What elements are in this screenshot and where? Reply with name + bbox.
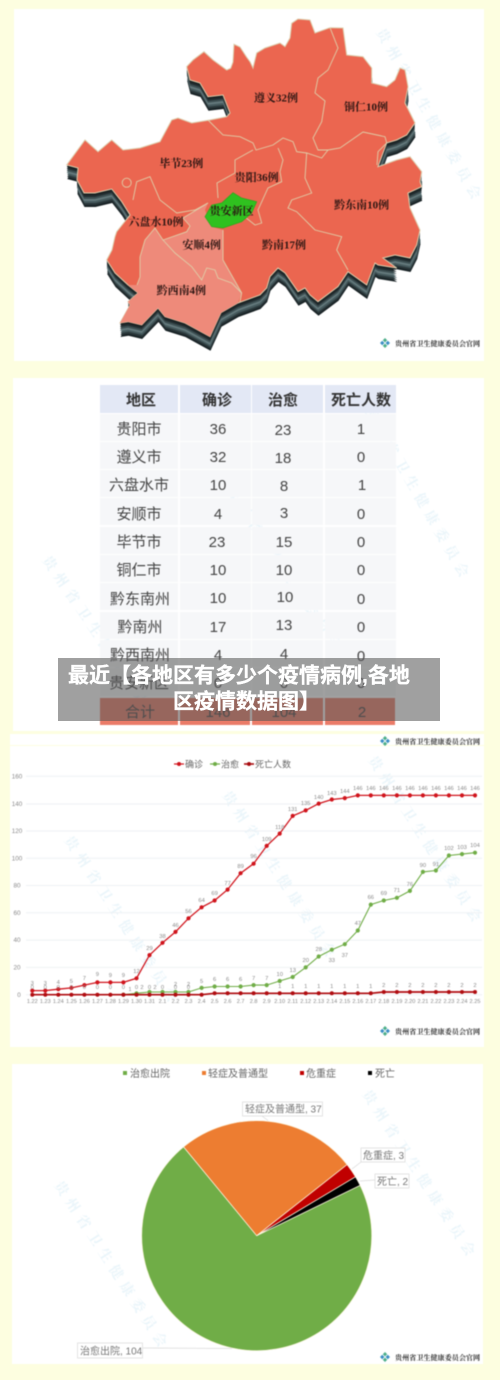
table body: 六盘水市 bbox=[109, 476, 169, 494]
pie label: mild 37 bbox=[242, 1102, 322, 1120]
logo: map panel bbox=[380, 338, 480, 348]
chart gridlines and axes: 2.16 bbox=[352, 999, 363, 1005]
data labels: deaths: 0 bbox=[174, 985, 177, 991]
table body: 0 bbox=[357, 648, 365, 665]
table body: 10 bbox=[276, 562, 292, 579]
table body: 10 bbox=[210, 590, 226, 607]
data labels: confirmed: 131 bbox=[288, 807, 298, 813]
data labels: confirmed: 146 bbox=[431, 786, 441, 792]
data labels: confirmed: 12 bbox=[133, 969, 140, 975]
table body: 0 bbox=[214, 675, 222, 692]
data labels: deaths: 0 bbox=[31, 985, 34, 991]
data labels: confirmed: 143 bbox=[327, 791, 337, 797]
chart gridlines and axes: 140 bbox=[12, 801, 23, 808]
chart gridlines and axes: 1.28 bbox=[105, 999, 116, 1005]
pie label: deaths 2 bbox=[360, 1174, 409, 1188]
data labels: confirmed: 146 bbox=[444, 786, 454, 792]
table body: 贵安新区 bbox=[109, 675, 169, 692]
title overlay banner bbox=[58, 658, 440, 721]
map label: Qiannan: 黔南17例 bbox=[262, 238, 306, 252]
chart gridlines and axes: 2.15 bbox=[339, 999, 350, 1005]
data labels: cured: 69 bbox=[381, 891, 387, 897]
data labels: deaths: 2 bbox=[382, 983, 385, 989]
map label: Qianxinan: 黔西南4例 bbox=[157, 283, 206, 297]
panel: line chart: 贵州省卫生健康委员会 bbox=[219, 788, 342, 965]
table body: 0 bbox=[357, 591, 365, 608]
series: cured (green) bbox=[123, 853, 475, 995]
chart gridlines and axes: 2.13 bbox=[313, 999, 324, 1005]
chart gridlines and axes: 40 bbox=[13, 937, 21, 944]
pie legend: 治愈出院 bbox=[130, 1067, 170, 1080]
panel: pie chart: 贵州省卫生健康委员会 bbox=[51, 1178, 174, 1355]
data labels: confirmed: 144 bbox=[340, 789, 350, 795]
data labels: cured: 6 bbox=[239, 977, 242, 983]
chart gridlines and axes: 0 bbox=[17, 992, 21, 999]
panel: map bbox=[14, 9, 487, 361]
data labels: deaths: 0 bbox=[57, 985, 60, 991]
pie legend: 死亡 bbox=[375, 1067, 395, 1080]
map label: Zunyi: 遵义32例 bbox=[254, 91, 298, 105]
data labels: deaths: 0 bbox=[187, 985, 190, 991]
chart gridlines and axes: 2.7 bbox=[237, 999, 244, 1005]
data labels: deaths: 1 bbox=[330, 984, 333, 990]
chart gridlines and axes: 1.24 bbox=[53, 999, 64, 1005]
table header: 治愈 bbox=[268, 391, 298, 409]
data labels: deaths: 0 bbox=[44, 985, 47, 991]
data labels: confirmed: 7 bbox=[83, 976, 86, 982]
logo: map panel: 贵州省卫生健康委员会官网 bbox=[395, 339, 480, 348]
chart legend: 死亡人数 bbox=[255, 758, 291, 770]
chart gridlines and axes: 2.3 bbox=[185, 999, 192, 1005]
map label: Gui'an: 贵安新区 bbox=[210, 204, 254, 218]
chart gridlines and axes: 2.24 bbox=[457, 999, 467, 1005]
table total row: 合计 bbox=[125, 704, 155, 721]
data labels: deaths: 2 bbox=[447, 983, 451, 989]
table body: 15 bbox=[276, 534, 292, 551]
table body: 黔东南州 bbox=[110, 591, 170, 608]
map label: Bijie: 毕节23例 bbox=[159, 156, 203, 170]
table body: 4 bbox=[280, 646, 288, 663]
data labels: cured: 2 bbox=[187, 982, 190, 988]
table body: 18 bbox=[275, 450, 291, 467]
table body: 0 bbox=[357, 449, 365, 466]
data labels: cured: 6 bbox=[213, 977, 216, 983]
table body: 8 bbox=[280, 478, 288, 495]
panel: line chart bbox=[10, 746, 488, 1047]
pie legend bbox=[123, 1067, 395, 1080]
logo: chart panel bbox=[380, 1026, 480, 1036]
table body: 安顺市 bbox=[116, 506, 162, 523]
chart gridlines and axes: 2.1 bbox=[159, 999, 166, 1005]
data labels: deaths: 2 bbox=[395, 983, 399, 989]
pie label: cured 104 bbox=[78, 1343, 232, 1358]
data labels: confirmed: 3 bbox=[31, 981, 34, 987]
data labels: deaths: 2 bbox=[408, 983, 412, 989]
chart gridlines and axes: 1.22 bbox=[27, 999, 38, 1005]
chart gridlines and axes: 2.9 bbox=[263, 999, 271, 1005]
data labels: cured: 33 bbox=[329, 958, 335, 964]
chart gridlines and axes: 2.17 bbox=[365, 999, 376, 1005]
chart gridlines and axes: 1.23 bbox=[40, 999, 51, 1005]
chart gridlines and axes: 1.26 bbox=[79, 999, 90, 1005]
chart gridlines and axes: 60 bbox=[13, 910, 21, 917]
pie label: severe 3: 危重症, 3 bbox=[363, 1149, 405, 1162]
logo: table panel: 贵州省卫生健康委员会官网 bbox=[395, 737, 480, 746]
panel: table bbox=[10, 378, 484, 746]
data labels: confirmed: 109 bbox=[262, 837, 272, 843]
table header: 地区 bbox=[126, 392, 156, 409]
data labels: confirmed: 38 bbox=[159, 934, 166, 940]
table body: 贵阳市 bbox=[116, 421, 162, 438]
data labels: deaths: 1 bbox=[343, 984, 346, 990]
table body: 32 bbox=[210, 449, 226, 466]
title text bbox=[68, 664, 410, 714]
table body: 3 bbox=[280, 505, 288, 522]
data labels: cured: 66 bbox=[368, 895, 374, 901]
chart gridlines and axes bbox=[12, 774, 482, 1005]
pie label: severe 3 bbox=[352, 1148, 405, 1169]
table body: 4 bbox=[214, 506, 222, 523]
table body: 13 bbox=[276, 617, 292, 634]
map label: Guiyang: 贵阳36例 bbox=[235, 170, 279, 184]
table body: 0 bbox=[280, 675, 288, 692]
panel: table: 贵州省卫生健康委员会 bbox=[222, 483, 348, 658]
title text: 最近【各地区有多少个疫情病例,各地 bbox=[68, 664, 410, 688]
data labels: deaths: 2 bbox=[421, 983, 425, 989]
table body: 黔西南州 bbox=[110, 647, 170, 664]
table body: 遵义市 bbox=[116, 448, 162, 466]
region borders bbox=[122, 28, 387, 302]
chart gridlines and axes: 2.8 bbox=[250, 999, 257, 1005]
data labels: cured: 2 bbox=[153, 985, 157, 991]
chart gridlines and axes: 1.29 bbox=[118, 999, 129, 1005]
logo: table panel bbox=[380, 736, 480, 746]
data labels: deaths: 0 bbox=[161, 985, 164, 991]
panel: map: 贵州省卫生健康委员会 bbox=[373, 26, 487, 207]
chart legend: 治愈 bbox=[221, 758, 239, 770]
panel: line chart: 贵州省卫生健康委员会 bbox=[61, 833, 184, 1010]
chart gridlines and axes: 2.23 bbox=[443, 999, 454, 1005]
chart gridlines and axes: 2.2 bbox=[172, 999, 179, 1005]
data labels: deaths: 2 bbox=[434, 983, 438, 989]
data labels: confirmed: 146 bbox=[392, 786, 402, 792]
data labels: deaths: 0 bbox=[70, 985, 73, 991]
table body: 23 bbox=[209, 534, 225, 551]
data labels: cured: 6 bbox=[226, 977, 229, 983]
data labels: deaths: 1 bbox=[304, 984, 307, 990]
map label: Liupanshui: 六盘水10例 bbox=[129, 214, 183, 228]
data labels: confirmed: 96 bbox=[250, 854, 257, 860]
data labels: deaths: 2 bbox=[460, 983, 464, 989]
chart gridlines and axes: 2.10 bbox=[274, 999, 285, 1005]
chart legend: 确诊 bbox=[185, 758, 203, 770]
data labels: confirmed: 146 bbox=[405, 786, 415, 792]
data labels: deaths: 0 bbox=[96, 985, 99, 991]
map labels bbox=[129, 91, 389, 297]
chart gridlines and axes: 2.25 bbox=[470, 999, 480, 1005]
chart gridlines and axes: 2.12 bbox=[300, 999, 311, 1005]
pie label: cured 104: 治愈出院, 104 bbox=[80, 1344, 143, 1358]
chart gridlines and axes: 1.31 bbox=[144, 999, 155, 1005]
data labels: confirmed: 46 bbox=[172, 923, 179, 929]
data labels: deaths: 2 bbox=[473, 983, 477, 989]
data labels: cured: 76 bbox=[407, 882, 413, 888]
data labels: deaths: 1 bbox=[356, 984, 359, 990]
data labels: cured: 104 bbox=[470, 843, 481, 849]
data labels: cured: 103 bbox=[457, 845, 467, 851]
data labels: confirmed: 56 bbox=[185, 909, 192, 915]
pie slices bbox=[142, 1121, 372, 1351]
panel: pie chart bbox=[12, 1064, 483, 1364]
map of Guizhou bbox=[67, 19, 422, 351]
chart gridlines and axes: 2.14 bbox=[326, 999, 337, 1005]
data labels: deaths: 1 bbox=[278, 984, 281, 990]
data labels: confirmed: 9 bbox=[122, 973, 125, 979]
table body: 23 bbox=[275, 422, 291, 439]
data labels: confirmed: 146 bbox=[366, 786, 376, 792]
data labels: cured: 47 bbox=[355, 921, 361, 927]
chart gridlines and axes: 120 bbox=[12, 828, 23, 835]
chart gridlines and axes: 2.22 bbox=[430, 999, 441, 1005]
pie legend: 轻症及普通型 bbox=[208, 1067, 268, 1080]
table body: 10 bbox=[277, 589, 293, 606]
data labels: confirmed: 146 bbox=[418, 786, 428, 792]
logo: pie panel: 贵州省卫生健康委员会官网 bbox=[395, 1353, 480, 1362]
data labels: cured: 7 bbox=[265, 976, 268, 982]
table body: 毕节市 bbox=[116, 534, 162, 551]
chart gridlines and axes: 2.4 bbox=[198, 999, 205, 1005]
table body bbox=[100, 414, 396, 696]
data labels: confirmed: 135 bbox=[301, 801, 311, 807]
logo: chart panel: 贵州省卫生健康委员会官网 bbox=[395, 1027, 480, 1036]
data labels: deaths: 0 bbox=[148, 985, 151, 991]
map label: Tongren: 铜仁10例 bbox=[344, 100, 388, 114]
data labels: confirmed: 5 bbox=[70, 979, 73, 985]
data labels: deaths bbox=[31, 983, 477, 991]
data labels: confirmed: 77 bbox=[224, 881, 231, 887]
data labels: cured bbox=[128, 843, 481, 993]
chart gridlines and axes: 20 bbox=[13, 964, 21, 972]
series: confirmed (red) bbox=[32, 795, 475, 991]
data labels: cured: 5 bbox=[200, 979, 203, 985]
chart gridlines and axes: 1.30 bbox=[131, 999, 142, 1005]
data labels: confirmed: 146 bbox=[353, 786, 363, 792]
series: deaths (dark red) bbox=[32, 992, 475, 995]
panel: table: 贵州省卫生健康委员会 bbox=[361, 404, 475, 585]
chart legend bbox=[174, 758, 291, 770]
data labels: confirmed bbox=[31, 786, 480, 987]
data labels: confirmed: 146 bbox=[470, 786, 480, 792]
data labels: confirmed: 4 bbox=[57, 980, 61, 986]
table body: 4 bbox=[214, 647, 222, 664]
title text: 区疫情数据图】 bbox=[173, 690, 320, 714]
data labels: confirmed: 69 bbox=[211, 891, 218, 897]
panel: table: 贵州省卫生健康委员会 bbox=[39, 553, 165, 728]
table body: 0 bbox=[357, 562, 365, 579]
logo: pie panel bbox=[380, 1352, 480, 1362]
panel: line chart: 贵州省卫生健康委员会 bbox=[365, 753, 488, 930]
table body: 36 bbox=[210, 421, 226, 438]
table body: 0 bbox=[357, 534, 365, 551]
table body: 17 bbox=[210, 619, 226, 636]
table body: 0 bbox=[357, 506, 365, 523]
data labels: cured: 1 bbox=[128, 987, 132, 993]
table body: 0 bbox=[357, 675, 365, 692]
data labels: cured: 13 bbox=[289, 968, 296, 974]
data labels: deaths: 1 bbox=[317, 984, 320, 990]
table body: 黔南州 bbox=[117, 619, 163, 636]
data labels: confirmed: 9 bbox=[96, 972, 99, 978]
table body: 1 bbox=[358, 477, 366, 494]
pie legend: 危重症 bbox=[306, 1067, 336, 1080]
table body: 铜仁市 bbox=[116, 562, 162, 579]
data labels: confirmed: 29 bbox=[146, 946, 153, 952]
data labels: confirmed: 140 bbox=[314, 795, 324, 801]
chart gridlines and axes: 2.5 bbox=[211, 999, 218, 1005]
data labels: deaths: 0 bbox=[135, 985, 138, 991]
data labels: deaths: 0 bbox=[109, 985, 112, 991]
data labels: cured: 71 bbox=[394, 888, 400, 894]
data labels: confirmed: 64 bbox=[198, 898, 206, 904]
table body: 10 bbox=[210, 477, 226, 494]
chart gridlines and axes: 2.18 bbox=[378, 999, 389, 1005]
data labels: deaths: 0 bbox=[83, 985, 86, 991]
light regions: Anshun and Qianxinan bbox=[120, 203, 242, 337]
chart gridlines and axes: 2.6 bbox=[224, 999, 231, 1005]
data labels: cured: 102 bbox=[444, 846, 454, 852]
chart gridlines and axes: 2.11 bbox=[287, 999, 298, 1005]
chart gridlines and axes: 100 bbox=[12, 856, 23, 862]
data labels: cured: 7 bbox=[252, 976, 255, 982]
data labels: deaths: 0 bbox=[122, 985, 125, 991]
table header bbox=[100, 385, 396, 413]
pie label: mild 37: 轻症及普通型, 37 bbox=[245, 1102, 322, 1116]
map label: Qiandongnan: 黔东南10例 bbox=[334, 198, 389, 212]
region: Gui'an new area bbox=[205, 193, 257, 228]
data labels: deaths: 1 bbox=[369, 984, 372, 990]
data labels: cured: 2 bbox=[174, 982, 177, 988]
data labels: confirmed: 146 bbox=[379, 786, 389, 792]
chart gridlines and axes: 1.25 bbox=[66, 999, 77, 1005]
table total row: 146 bbox=[205, 704, 231, 721]
chart gridlines and axes: 2.20 bbox=[404, 999, 415, 1005]
data labels: confirmed: 146 bbox=[457, 786, 467, 792]
chart gridlines and axes: 2.21 bbox=[417, 999, 428, 1005]
data labels: confirmed: 9 bbox=[109, 973, 112, 979]
table header: 死亡人数 bbox=[331, 391, 391, 409]
table total row: 2 bbox=[358, 704, 366, 721]
table header: 确诊 bbox=[202, 391, 232, 409]
pie label: deaths 2: 死亡, 2 bbox=[377, 1175, 409, 1188]
table total row: 104 bbox=[271, 704, 297, 721]
table body: 0 bbox=[357, 619, 365, 636]
data labels: deaths: 1 bbox=[291, 984, 294, 990]
chart gridlines and axes: 80 bbox=[13, 882, 21, 890]
data labels: confirmed: 89 bbox=[237, 864, 244, 870]
data labels: confirmed: 3 bbox=[44, 981, 47, 987]
chart gridlines and axes: 1.27 bbox=[92, 999, 103, 1005]
table body: 10 bbox=[210, 562, 226, 579]
data labels: cured: 10 bbox=[276, 972, 283, 978]
data labels: cured: 90 bbox=[420, 863, 426, 869]
data labels: cured: 37 bbox=[342, 953, 348, 959]
map label: Anshun: 安顺4例 bbox=[182, 238, 221, 252]
panel: pie chart: 贵州省卫生健康委员会 bbox=[359, 1087, 482, 1264]
data labels: cured: 2 bbox=[140, 985, 144, 991]
data labels: cured: 28 bbox=[315, 947, 322, 953]
table total row bbox=[100, 698, 395, 725]
data labels: confirmed: 118 bbox=[275, 825, 284, 831]
data labels: cured: 20 bbox=[302, 958, 309, 964]
table body: 1 bbox=[357, 421, 365, 438]
chart gridlines and axes: 160 bbox=[12, 774, 23, 780]
chart gridlines and axes: 2.19 bbox=[391, 999, 402, 1005]
data labels: cured: 91 bbox=[433, 862, 439, 868]
